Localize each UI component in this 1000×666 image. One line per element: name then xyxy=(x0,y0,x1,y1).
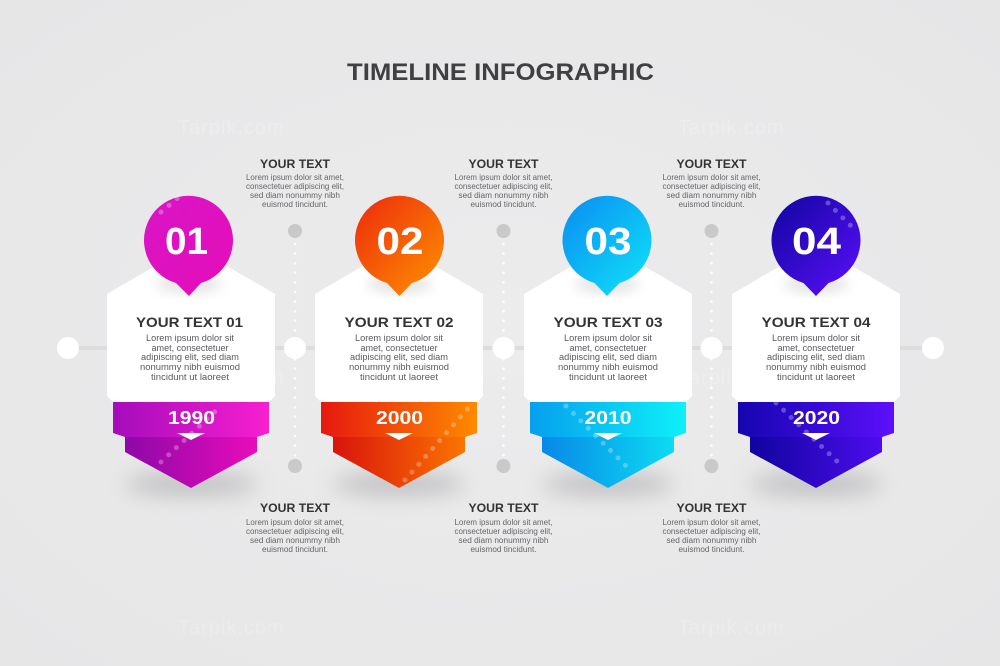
bottom note 2 xyxy=(454,501,552,554)
bottom note 1: euismod tincidunt. xyxy=(262,545,328,554)
panel: milestone 03 xyxy=(524,196,692,495)
panel: milestone 03: 2010 xyxy=(584,408,632,428)
top note 2: Lorem ipsum dolor sit amet, xyxy=(454,173,552,182)
top note 2: consectetuer adipiscing elit, xyxy=(454,182,552,191)
panel: milestone 01: amet, consectetuer xyxy=(152,343,228,353)
panel: milestone 03: adipiscing elit, sed diam xyxy=(559,352,657,362)
panel: milestone 04: amet, consectetuer xyxy=(778,343,854,353)
watermarks xyxy=(178,117,785,639)
panel: milestone 02: amet, consectetuer xyxy=(360,343,438,353)
timeline axis xyxy=(57,337,944,359)
panel: milestone 03: tincidunt ut laoreet xyxy=(569,372,648,382)
top note 3: YOUR TEXT xyxy=(676,157,747,171)
panel: milestone 02: YOUR TEXT 02 xyxy=(344,314,454,330)
panel: milestone 01 xyxy=(107,196,275,495)
top note 2: euismod tincidunt. xyxy=(470,200,536,209)
bottom note 1 xyxy=(246,501,344,554)
bottom note 3: sed diam nonummy nibh xyxy=(666,536,756,545)
top note 3: euismod tincidunt. xyxy=(678,200,744,209)
connector 3 xyxy=(700,224,722,473)
watermarks: Tarpik.com xyxy=(178,117,285,139)
top note 1 xyxy=(246,157,344,209)
bottom note 2: Lorem ipsum dolor sit amet, xyxy=(454,518,552,527)
watermarks: Tarpik.com xyxy=(678,117,785,139)
bottom note 2: euismod tincidunt. xyxy=(470,545,536,554)
panel: milestone 01: 01 xyxy=(165,221,208,263)
bottom note 1: sed diam nonummy nibh xyxy=(250,536,340,545)
panel: milestone 02: Lorem ipsum dolor sit xyxy=(355,333,443,343)
top note 1: YOUR TEXT xyxy=(260,157,331,171)
top note 1: sed diam nonummy nibh xyxy=(250,191,340,200)
panel: milestone 02: tincidunt ut laoreet xyxy=(360,372,439,382)
panel: milestone 03: 03 xyxy=(584,221,632,263)
top note 2: YOUR TEXT xyxy=(468,157,539,171)
panel: milestone 04: YOUR TEXT 04 xyxy=(762,314,871,330)
panel: milestone 02: adipiscing elit, sed diam xyxy=(350,352,448,362)
bottom note 1: Lorem ipsum dolor sit amet, xyxy=(246,518,344,527)
panel: milestone 01: Lorem ipsum dolor sit xyxy=(146,333,234,343)
bottom note 3: YOUR TEXT xyxy=(676,501,747,515)
panel: milestone 02: nonummy nibh euismod xyxy=(349,362,449,372)
top note 3: Lorem ipsum dolor sit amet, xyxy=(662,173,760,182)
watermarks: Tarpik.com xyxy=(678,617,785,639)
panel: milestone 02 xyxy=(315,196,483,495)
title: TIMELINE INFOGRAPHIC xyxy=(347,59,654,86)
bottom note 3: euismod tincidunt. xyxy=(678,545,744,554)
panel: milestone 03: Lorem ipsum dolor sit xyxy=(564,333,652,343)
bottom note 3 xyxy=(662,501,760,554)
panel: milestone 01: nonummy nibh euismod xyxy=(140,362,240,372)
watermarks: Tarpik.com xyxy=(178,367,285,389)
top note 3 xyxy=(662,157,760,209)
panel: milestone 01: tincidunt ut laoreet xyxy=(151,372,230,382)
top note 1: Lorem ipsum dolor sit amet, xyxy=(246,173,344,182)
top note 2: sed diam nonummy nibh xyxy=(458,191,548,200)
panel: milestone 04: tincidunt ut laoreet xyxy=(777,372,856,382)
top note 3: consectetuer adipiscing elit, xyxy=(662,182,760,191)
panel: milestone 01: 1990 xyxy=(168,408,215,428)
bottom note 1: consectetuer adipiscing elit, xyxy=(246,527,344,536)
panel: milestone 03: YOUR TEXT 03 xyxy=(554,314,663,330)
panel: milestone 04: Lorem ipsum dolor sit xyxy=(772,333,860,343)
top note 1: euismod tincidunt. xyxy=(262,200,328,209)
panel: milestone 01: YOUR TEXT 01 xyxy=(136,314,243,330)
panel: milestone 02: 2000 xyxy=(376,408,423,428)
panel: milestone 04: 2020 xyxy=(793,408,840,428)
bottom note 2: sed diam nonummy nibh xyxy=(458,536,548,545)
top note 1: consectetuer adipiscing elit, xyxy=(246,182,344,191)
bottom note 3: consectetuer adipiscing elit, xyxy=(662,527,760,536)
bottom note 2: consectetuer adipiscing elit, xyxy=(454,527,552,536)
connector 2 xyxy=(492,224,514,473)
bottom note 1: YOUR TEXT xyxy=(260,501,331,515)
top note 2 xyxy=(454,157,552,209)
watermarks: Tarpik.com xyxy=(678,367,785,389)
panel: milestone 04: nonummy nibh euismod xyxy=(766,362,866,372)
panel: milestone 04 xyxy=(732,196,900,495)
panel: milestone 04: adipiscing elit, sed diam xyxy=(767,352,865,362)
panel: milestone 04: 04 xyxy=(792,221,841,263)
panel: milestone 02: 02 xyxy=(376,221,424,263)
panel: milestone 03: nonummy nibh euismod xyxy=(558,362,658,372)
connector 1 xyxy=(284,224,306,473)
watermarks: Tarpik.com xyxy=(178,617,285,639)
bottom note 2: YOUR TEXT xyxy=(468,501,539,515)
top note 3: sed diam nonummy nibh xyxy=(666,191,756,200)
panel: milestone 01: adipiscing elit, sed diam xyxy=(141,352,239,362)
panel: milestone 03: amet, consectetuer xyxy=(570,343,646,353)
bottom note 3: Lorem ipsum dolor sit amet, xyxy=(662,518,760,527)
